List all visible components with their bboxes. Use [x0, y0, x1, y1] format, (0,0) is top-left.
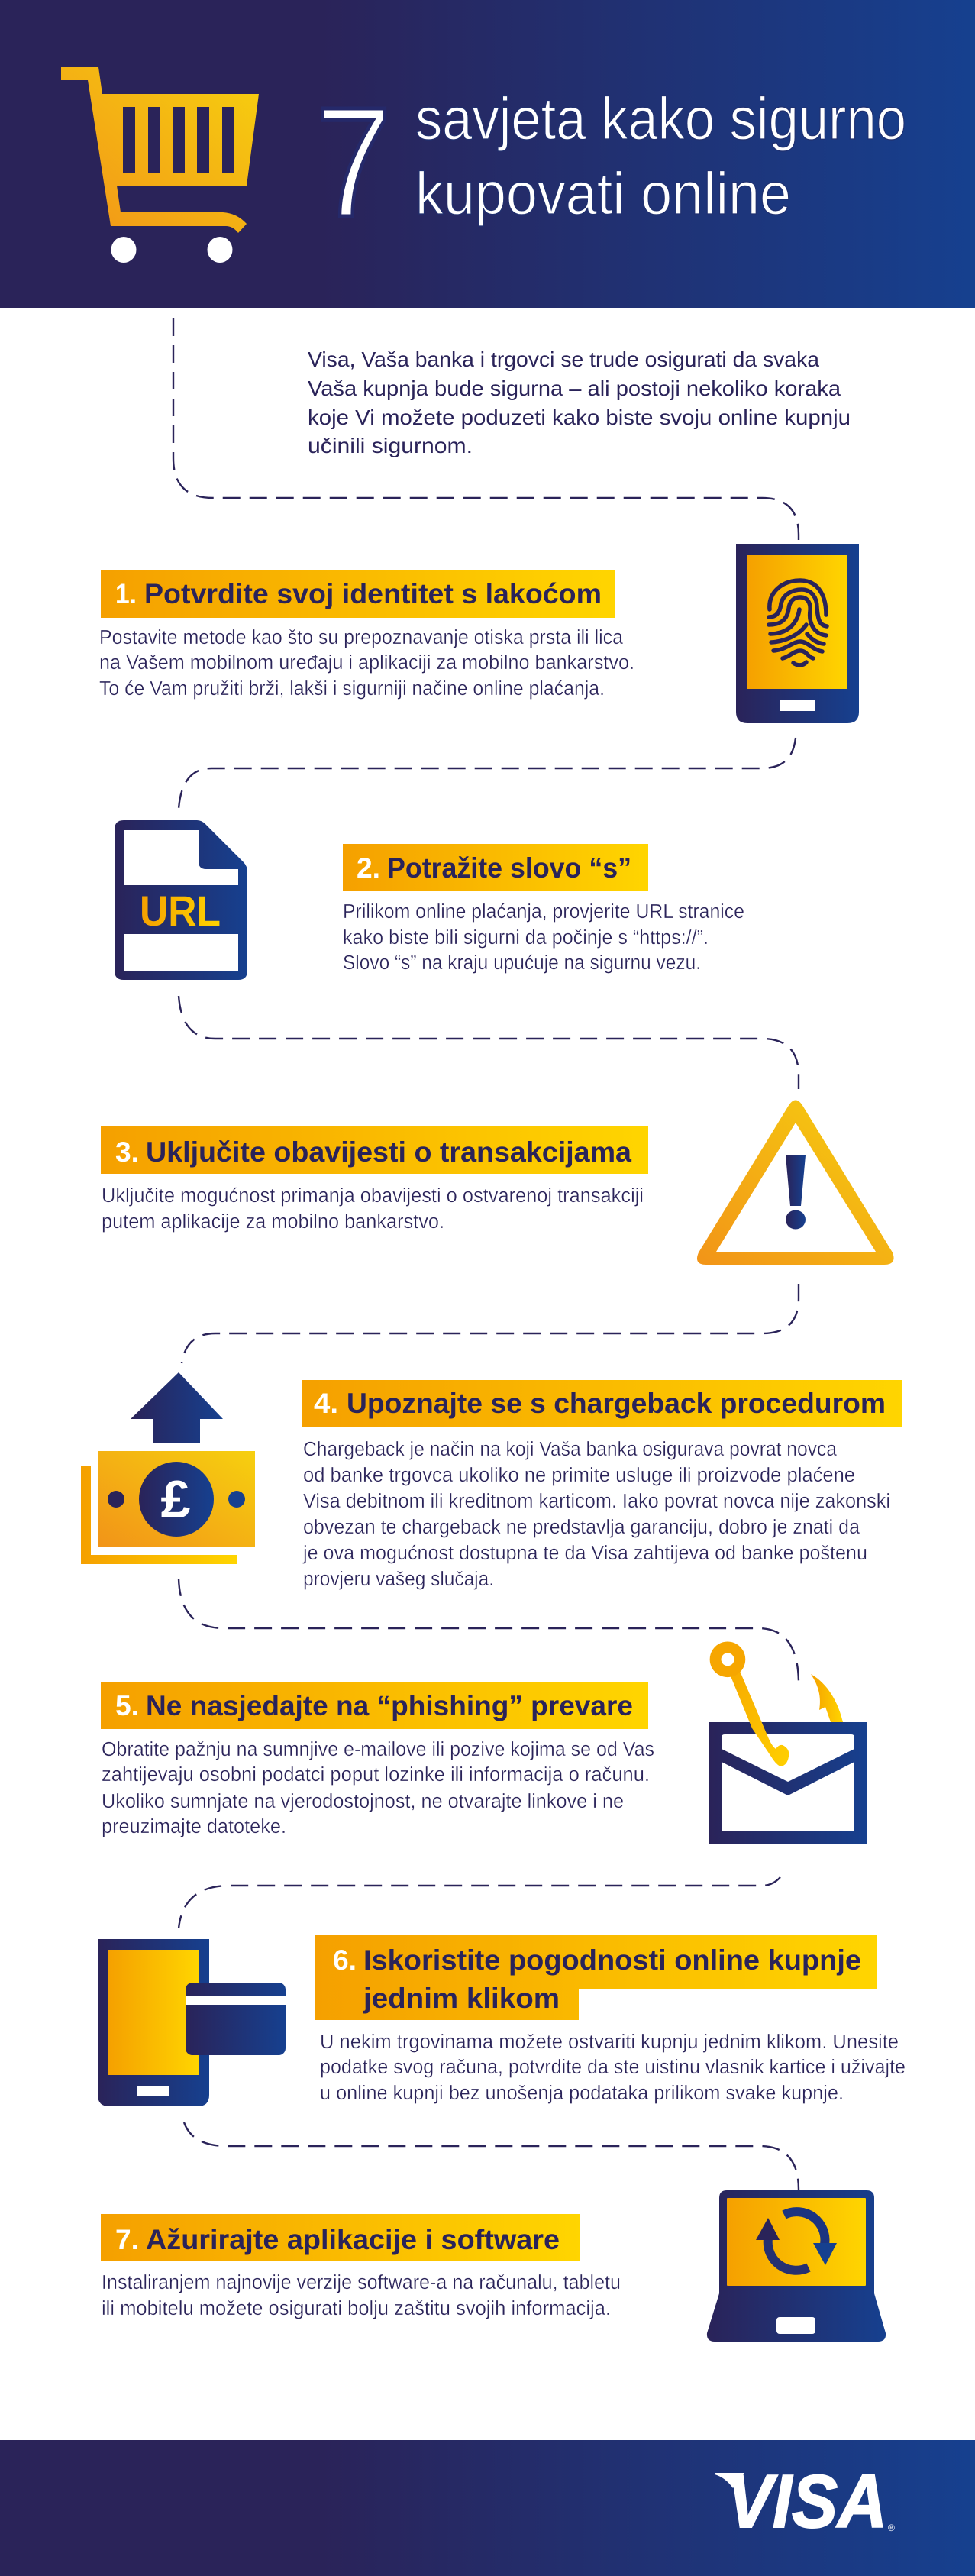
tip 4 text: je ova mogućnost dostupna te da Visa zahtijeva od banke poštenu — [302, 1543, 867, 1564]
tip 4 text — [302, 1439, 890, 1590]
tip 6 heading: 6. — [333, 1944, 357, 1976]
tip 2 heading — [343, 844, 648, 891]
tip 7 heading — [101, 2214, 580, 2261]
icon: shopping cart — [61, 67, 259, 263]
tip 7 heading: Ažurirajte aplikacije i software — [146, 2224, 560, 2255]
tip 4 text: obvezan te chargeback ne predstavlja garanciju, dobro je znati da — [303, 1517, 860, 1538]
icon: URL document: URL — [140, 887, 221, 935]
intro text: koje Vi možete poduzeti kako biste svoju online kupnju — [308, 406, 851, 429]
tip 3 heading — [101, 1126, 648, 1174]
tip 1 heading — [101, 570, 615, 618]
tip 7 text: Instaliranjem najnovije verzije software-a na računalu, tabletu — [102, 2272, 621, 2293]
dashed connector 4 — [182, 1284, 799, 1363]
tip 5 — [101, 1642, 867, 1844]
VISA logo: VISA — [727, 2459, 887, 2543]
icon: laptop with refresh arrows — [707, 2190, 886, 2342]
tip 7 heading: 7. — [115, 2224, 139, 2255]
tip 3 heading: Uključite obavijesti o transakcijama — [146, 1136, 631, 1168]
dashed connector 2 — [179, 738, 796, 809]
tip 4 text: provjeru vašeg slučaja. — [303, 1569, 494, 1590]
tip 5 text — [102, 1739, 654, 1837]
tip 6 heading — [315, 1935, 877, 2020]
tip 1 heading: 1. — [115, 578, 137, 609]
intro text: učinili sigurnom. — [308, 434, 473, 457]
dashed connector 1 — [173, 318, 799, 540]
tip 7 text — [102, 2272, 621, 2319]
tip 2 text: kako biste bili sigurni da počinje s “https://”. — [343, 927, 709, 949]
tip 7 text: ili mobitelu možete osigurati bolju zaštitu svojih informacija. — [102, 2298, 611, 2319]
tip 5 text: preuzimajte datoteke. — [102, 1816, 286, 1837]
tip 2 text: Prilikom online plaćanja, provjerite URL stranice — [343, 901, 744, 923]
tip 4 text: Visa debitnom ili kreditnom karticom. Iako povrat novca nije zakonski — [303, 1491, 890, 1512]
tip 4 heading — [302, 1380, 902, 1427]
dashed connector 3 — [179, 996, 799, 1089]
tip 2 text: Slovo “s” na kraju upućuje na sigurnu vezu. — [343, 952, 701, 974]
header banner — [0, 0, 975, 308]
tip 6 text — [320, 2031, 906, 2104]
tip 2 text — [343, 901, 744, 974]
tip 5 text: Obratite pažnju na sumnjive e-mailove ili pozive kojima se od Vas — [102, 1739, 654, 1760]
dashed connector 6 — [179, 1877, 780, 1928]
tip 1 text — [99, 627, 634, 700]
tip 4 heading: Upoznajte se s chargeback procedurom — [347, 1388, 886, 1419]
dashed connector 5 — [179, 1579, 799, 1684]
tip 2 heading: Potražite slovo “s” — [387, 852, 631, 884]
tip 5 heading — [101, 1682, 648, 1729]
tip 4 — [81, 1372, 902, 1590]
title — [415, 85, 906, 227]
tip 3 text: Uključite mogućnost primanja obavijesti o ostvarenoj transakciji — [102, 1185, 644, 1207]
tip 5 heading: 5. — [115, 1690, 139, 1721]
title number: 7 — [315, 75, 392, 250]
tip 2 heading: 2. — [357, 852, 380, 884]
icon: phone with fingerprint — [736, 544, 859, 723]
tip 3 heading: 3. — [115, 1136, 139, 1168]
tip 2 — [115, 820, 744, 980]
icon: banknote with up arrow — [81, 1372, 255, 1564]
intro text: Visa, Vaša banka i trgovci se trude osigurati da svaka — [308, 347, 820, 371]
title: kupovati online — [415, 160, 791, 227]
tip 6 heading: jednim klikom — [363, 1983, 560, 2014]
icon: hook in envelope — [709, 1642, 867, 1844]
tip 4 text: Chargeback je način na koji Vaša banka osigurava povrat novca — [303, 1439, 838, 1460]
icon: phone and card — [98, 1939, 286, 2106]
tip 5 heading: Ne nasjedajte na “phishing” prevare — [146, 1690, 633, 1721]
intro text — [308, 347, 851, 457]
VISA logo: ® — [888, 2523, 895, 2533]
icon: banknote with up arrow: £ — [161, 1469, 191, 1529]
footer banner — [0, 2440, 975, 2576]
title: savjeta kako sigurno — [415, 85, 906, 152]
tip 3 — [101, 1100, 894, 1265]
tip 3 text — [102, 1185, 644, 1233]
tip 6 text: U nekim trgovinama možete ostvariti kupnju jednim klikom. Unesite — [320, 2031, 899, 2053]
tip 1 heading: Potvrdite svoj identitet s lakoćom — [144, 578, 602, 609]
tip 1 text: na Vašem mobilnom uređaju i aplikaciji za mobilno bankarstvo. — [99, 652, 634, 674]
tip 4 text: od banke trgovca ukoliko ne primite usluge ili proizvode plaćene — [303, 1465, 855, 1486]
tip 6 — [98, 1935, 906, 2106]
tip 4 heading: 4. — [314, 1388, 338, 1419]
icon: warning triangle — [697, 1100, 894, 1265]
dashed connector 7 — [184, 2122, 799, 2190]
tip 1 text: Postavite metode kao što su prepoznavanje otiska prsta ili lica — [99, 627, 624, 648]
tip 6 text: podatke svog računa, potvrdite da ste uistinu vlasnik kartice i uživajte — [320, 2057, 906, 2078]
tip 1 text: To će Vam pružiti brži, lakši i sigurniji načine online plaćanja. — [99, 678, 605, 700]
tip 7 — [101, 2190, 886, 2342]
intro text: Vaša kupnja bude sigurna – ali postoji nekoliko koraka — [308, 377, 841, 400]
tip 5 text: Ukoliko sumnjate na vjerodostojnost, ne otvarajte linkove i ne — [102, 1791, 624, 1812]
tip 3 text: putem aplikacije za mobilno bankarstvo. — [102, 1211, 444, 1233]
tip 6 heading: Iskoristite pogodnosti online kupnje — [363, 1944, 861, 1976]
tip 6 text: u online kupnji bez unošenja podataka prilikom svake kupnje. — [320, 2083, 844, 2104]
icon: URL document — [115, 820, 247, 980]
tip 1 — [99, 544, 859, 723]
tip 5 text: zahtijevaju osobni podatci poput lozinke ili informacija o računu. — [102, 1764, 650, 1786]
